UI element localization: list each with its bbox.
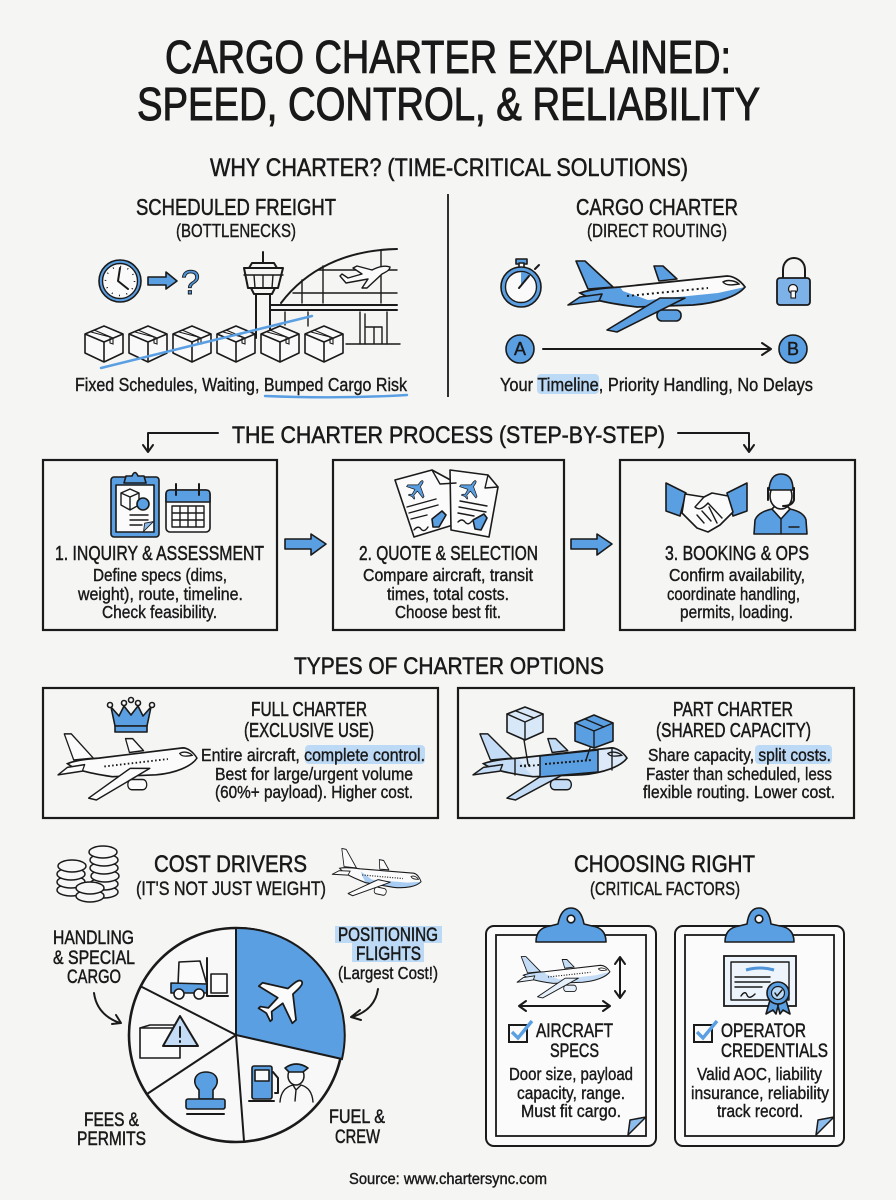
icons: dimension arrows: [519, 957, 625, 1011]
aircraft specs text: capacity, range.: [517, 1083, 625, 1103]
step 2 text: times, total costs.: [387, 584, 509, 604]
icon: crown: [108, 698, 154, 732]
step 2 text: [363, 565, 533, 622]
page fold: [628, 1117, 646, 1135]
full charter heading: (EXCLUSIVE USE): [244, 720, 374, 742]
panel: scheduled freight: [75, 194, 408, 397]
label: handling: CARGO: [67, 967, 121, 988]
heading: why charter: WHY CHARTER? (TIME-CRITICAL SOLUTIONS): [210, 154, 688, 182]
label: fees and permits: [77, 1110, 146, 1150]
step 1 text: [77, 565, 243, 622]
icon: box with warning: [140, 1016, 198, 1058]
label: positioning flights: (Largest Cost!): [338, 963, 438, 983]
arrow: step 1 to 2: [285, 534, 326, 555]
label: fuel and crew: FUEL &: [329, 1107, 385, 1128]
label: fees and permits: PERMITS: [77, 1129, 146, 1150]
caption: Fixed Schedules, Waiting, Bumped Cargo Risk: [75, 374, 408, 395]
icon: plane with shared segments: [473, 734, 627, 800]
icon: clipboard: [111, 472, 159, 537]
heading: cost drivers: (IT'S NOT JUST WEIGHT): [136, 879, 326, 900]
heading: cargo charter: (DIRECT ROUTING): [587, 220, 727, 241]
icon: terminal with plane: [271, 249, 400, 344]
label: handling: [53, 928, 135, 988]
panel: cargo charter: [500, 194, 813, 395]
card: aircraft specs: [486, 908, 656, 1146]
part charter text: [643, 745, 835, 802]
icon: operations agent: [754, 474, 807, 534]
label: fuel and crew: CREW: [335, 1127, 380, 1148]
icon: fuel pump: [249, 1066, 278, 1101]
label: fuel and crew: [329, 1107, 385, 1148]
slice: positioning flights: [236, 928, 345, 1059]
part charter heading: PART CHARTER: [673, 699, 793, 721]
full charter text: Best for large/urgent volume: [215, 764, 413, 784]
pie chart: [129, 928, 345, 1142]
caption: Your Timeline, Priority Handling, No Delays: [500, 374, 813, 395]
route A to B: [506, 335, 807, 363]
heading: cost drivers: COST DRIVERS: [154, 851, 307, 878]
highlight: complete control: [305, 745, 425, 764]
panel: step 3: [620, 460, 855, 630]
icon: sized plane: [517, 957, 610, 998]
icon: stamp: [186, 1072, 225, 1114]
step 3 heading: 3. BOOKING & OPS: [665, 543, 809, 565]
heading: scheduled freight: SCHEDULED FREIGHT: [136, 194, 336, 220]
icon: light box: [507, 707, 543, 740]
icon: certificate: [724, 956, 796, 1014]
label: positioning flights: FLIGHTS: [356, 944, 421, 965]
icon: clip: [725, 908, 794, 942]
icon: question mark: ?: [181, 264, 200, 302]
heading: cargo charter: CARGO CHARTER: [576, 194, 738, 220]
full charter text: [201, 745, 425, 802]
icon: handshake: [666, 483, 747, 532]
icon: cargo boxes: [85, 326, 343, 362]
arrow: clock to question: [148, 272, 177, 289]
icon: clip: [536, 908, 606, 942]
icon: blue box: [575, 715, 613, 748]
label: handling: HANDLING: [53, 928, 134, 949]
source: Source: www.chartersync.com: [349, 1171, 547, 1188]
icon: large plane: [568, 261, 745, 332]
step 1 text: weight), route, timeline.: [77, 584, 243, 604]
route A to B: B: [787, 339, 799, 359]
heading: types of charter: TYPES OF CHARTER OPTIONS: [294, 653, 604, 680]
underline: [265, 395, 407, 397]
heading: scheduled freight: (BOTTLENECKS): [176, 220, 296, 241]
icon: stopwatch: [501, 259, 541, 307]
route A to B: A: [514, 339, 526, 359]
icon: checkbox: [509, 1021, 532, 1042]
icon: pilot: [280, 1064, 313, 1102]
step 2 heading: 2. QUOTE & SELECTION: [359, 543, 538, 565]
part charter heading: (SHARED CAPACITY): [656, 720, 811, 742]
panel: full charter: [43, 688, 438, 818]
heading: choosing right: (CRITICAL FACTORS): [590, 878, 740, 899]
title: SPEED, CONTROL, & RELIABILITY: [137, 78, 760, 130]
aircraft specs text: Must fit cargo.: [521, 1101, 621, 1121]
heading: choosing right: CHOOSING RIGHT: [574, 851, 755, 878]
icon: coins: [57, 846, 119, 902]
aircraft specs heading: SPECS: [550, 1041, 599, 1062]
panel: choosing right: [486, 851, 844, 1146]
icon: calendar: [166, 484, 210, 532]
highlight: split costs: [755, 745, 832, 764]
highlight: timeline: [537, 374, 599, 394]
aircraft specs heading: [536, 1021, 613, 1062]
operator credentials text: track record.: [717, 1101, 803, 1121]
heading: scheduled freight: [136, 194, 336, 241]
part charter text: Share capacity, split costs.: [648, 745, 831, 765]
heading: choosing right: [574, 851, 755, 899]
icon: clock: [99, 260, 141, 302]
step 3 text: coordinate handling,: [667, 584, 800, 604]
panel: step 2: [333, 460, 564, 630]
part charter heading: [656, 699, 811, 742]
full charter text: (60%+ payload). Higher cost.: [215, 782, 413, 802]
step 1 heading: 1. INQUIRY & ASSESSMENT: [55, 543, 264, 565]
heading: the charter process: THE CHARTER PROCESS (STEP-BY-STEP): [232, 422, 665, 449]
operator credentials heading: CREDENTIALS: [721, 1041, 828, 1062]
step 2 text: Choose best fit.: [395, 602, 501, 622]
icon: padlock: [777, 258, 810, 305]
operator credentials text: Valid AOC, liability: [697, 1064, 822, 1084]
full charter heading: FULL CHARTER: [251, 699, 367, 721]
icon: small plane: [329, 848, 424, 909]
icon: quote documents: [395, 470, 498, 537]
step 3 text: Confirm availability,: [669, 565, 805, 585]
heading: cargo charter: [576, 194, 738, 241]
arrow: step 2 to 3: [571, 534, 612, 555]
title: CARGO CHARTER EXPLAINED:: [165, 31, 731, 83]
arrow: positioning flights: [351, 989, 378, 1020]
step 2 text: Compare aircraft, transit: [363, 565, 533, 585]
title: [137, 31, 760, 130]
icon: checkbox: [694, 1021, 717, 1042]
blue strike line: [101, 316, 312, 368]
arrow: process right: [678, 433, 754, 452]
arrow: handling: [94, 993, 121, 1024]
operator credentials text: insurance, reliability: [691, 1083, 829, 1103]
operator credentials heading: [721, 1021, 828, 1062]
operator credentials heading: OPERATOR: [721, 1021, 806, 1042]
part charter text: Faster than scheduled, less: [646, 764, 832, 784]
page fold: [816, 1117, 834, 1135]
icon: white plane: [58, 734, 197, 800]
icon: control tower: [244, 252, 283, 340]
aircraft specs text: Door size, payload: [509, 1064, 633, 1084]
label: fees and permits: FEES &: [84, 1110, 139, 1131]
panel: cost drivers: [53, 846, 442, 1150]
step 3 text: [667, 565, 805, 622]
panel: step 1: [43, 460, 277, 630]
step 3 text: permits, loading.: [680, 602, 793, 622]
arrow: process left: [143, 433, 218, 452]
icon: forklift: [171, 958, 228, 999]
operator credentials text: [691, 1064, 829, 1121]
heading: cost drivers: [136, 851, 326, 900]
aircraft specs heading: AIRCRAFT: [536, 1021, 613, 1042]
aircraft specs text: [509, 1064, 633, 1121]
part charter text: flexible routing. Lower cost.: [643, 782, 835, 802]
label: positioning flights: POSITIONING: [338, 925, 438, 946]
panel: part charter: [458, 688, 854, 818]
highlight: positioning flights: [335, 926, 442, 962]
label: positioning flights: [338, 925, 438, 983]
step 1 text: Define specs (dims,: [93, 565, 227, 585]
step 1 text: Check feasibility.: [102, 602, 217, 622]
full charter heading: [244, 699, 374, 742]
card: operator credentials: [675, 908, 844, 1146]
label: handling: & SPECIAL: [53, 948, 135, 969]
icon: white plane in slice: [248, 963, 318, 1033]
full charter text: Entire aircraft, complete control.: [201, 745, 425, 765]
